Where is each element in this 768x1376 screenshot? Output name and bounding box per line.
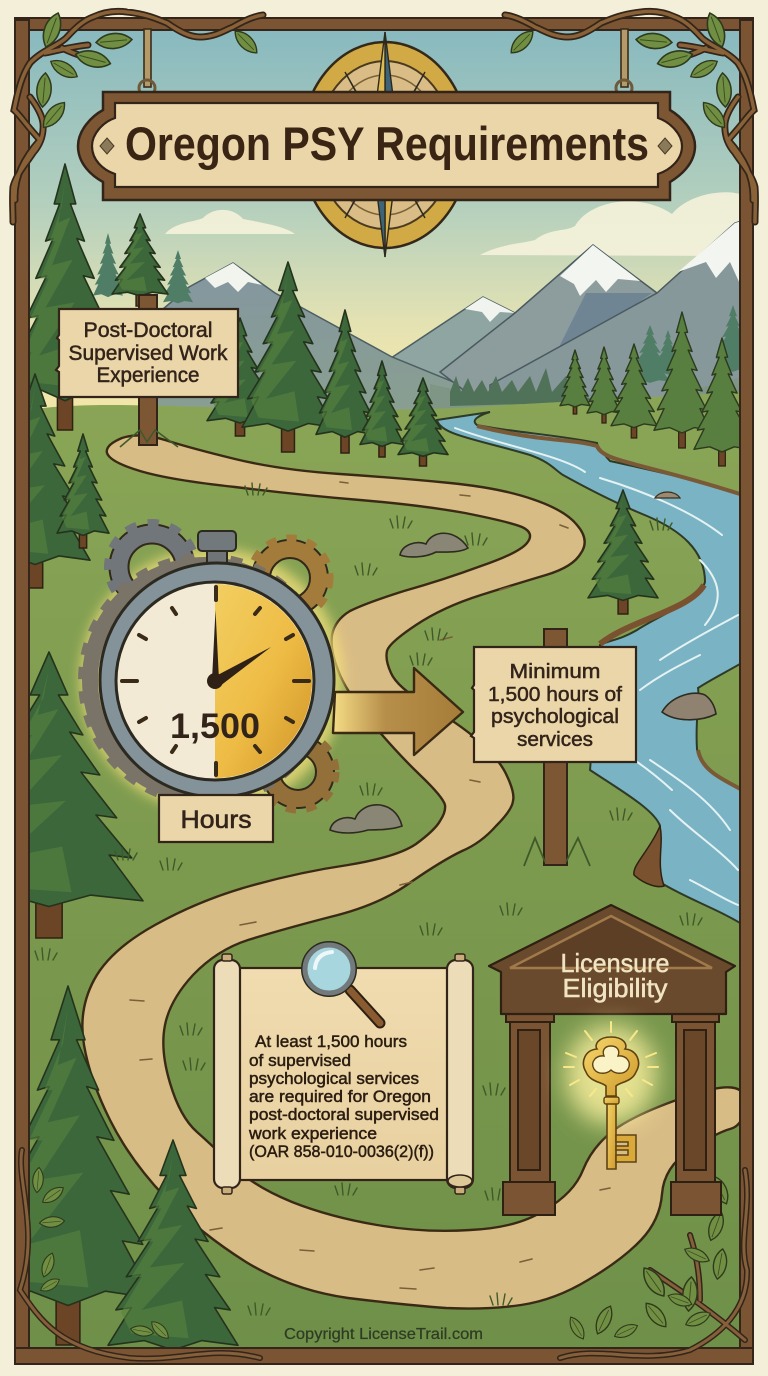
compass emblem [301, 32, 469, 257]
gears [83, 524, 335, 809]
gate text: Licensure [560, 948, 670, 978]
hands [212, 610, 219, 680]
scroll text: (OAR 858-010-0036(2)(f)) [249, 1142, 434, 1161]
ground [29, 392, 745, 1349]
scroll text: work experience [248, 1124, 377, 1143]
scroll text: post-doctoral supervised [249, 1105, 439, 1124]
sign text [488, 660, 622, 751]
magnifying glass [302, 942, 380, 1023]
gate text: Eligibility [562, 973, 668, 1003]
sign text: 1,500 hours of [488, 683, 622, 706]
grass tufts [35, 483, 702, 1315]
roof [489, 905, 735, 1014]
scroll text [248, 1032, 439, 1161]
sign text [68, 319, 228, 387]
gate text [560, 948, 670, 1003]
hours label: Hours [180, 806, 252, 834]
rocks [330, 533, 716, 833]
sign text: Minimum [510, 660, 600, 683]
trail [82, 435, 745, 1309]
scroll text: psychological services [249, 1069, 419, 1088]
far trees [11, 164, 753, 430]
mid trees [0, 262, 750, 1376]
clouds [165, 192, 745, 256]
title text: Oregon PSY Requirements [125, 117, 649, 170]
sign text: psychological [491, 705, 619, 728]
golden key [564, 1022, 658, 1169]
scroll text: At least 1,500 hours [255, 1032, 407, 1051]
title sign [78, 92, 695, 200]
hanging ropes [139, 29, 632, 96]
hours label [159, 795, 273, 842]
sign text: Supervised Work [68, 342, 228, 365]
scroll [214, 954, 473, 1194]
licensure gate [489, 905, 735, 1215]
gold half [215, 584, 312, 778]
ticks [122, 587, 309, 775]
columns [503, 1014, 721, 1215]
signpost: post-doctoral [56, 295, 238, 447]
sky [29, 29, 741, 429]
sign text: services [517, 728, 593, 751]
mountains [158, 221, 739, 410]
sign text: Experience [96, 364, 200, 387]
signpost: minimum hours [471, 629, 636, 866]
hours value: 1,500 [170, 707, 260, 746]
scroll text: are required for Oregon [249, 1087, 431, 1106]
river [437, 412, 745, 926]
watch case [100, 563, 334, 797]
trail marks [130, 482, 610, 1289]
sign text: Post-Doctoral [84, 319, 212, 342]
crown [207, 547, 227, 563]
scroll text: of supervised [249, 1051, 351, 1070]
copyright: Copyright LicenseTrail.com [284, 1326, 483, 1343]
arrow [333, 668, 463, 755]
stopwatch with gears [80, 524, 344, 812]
